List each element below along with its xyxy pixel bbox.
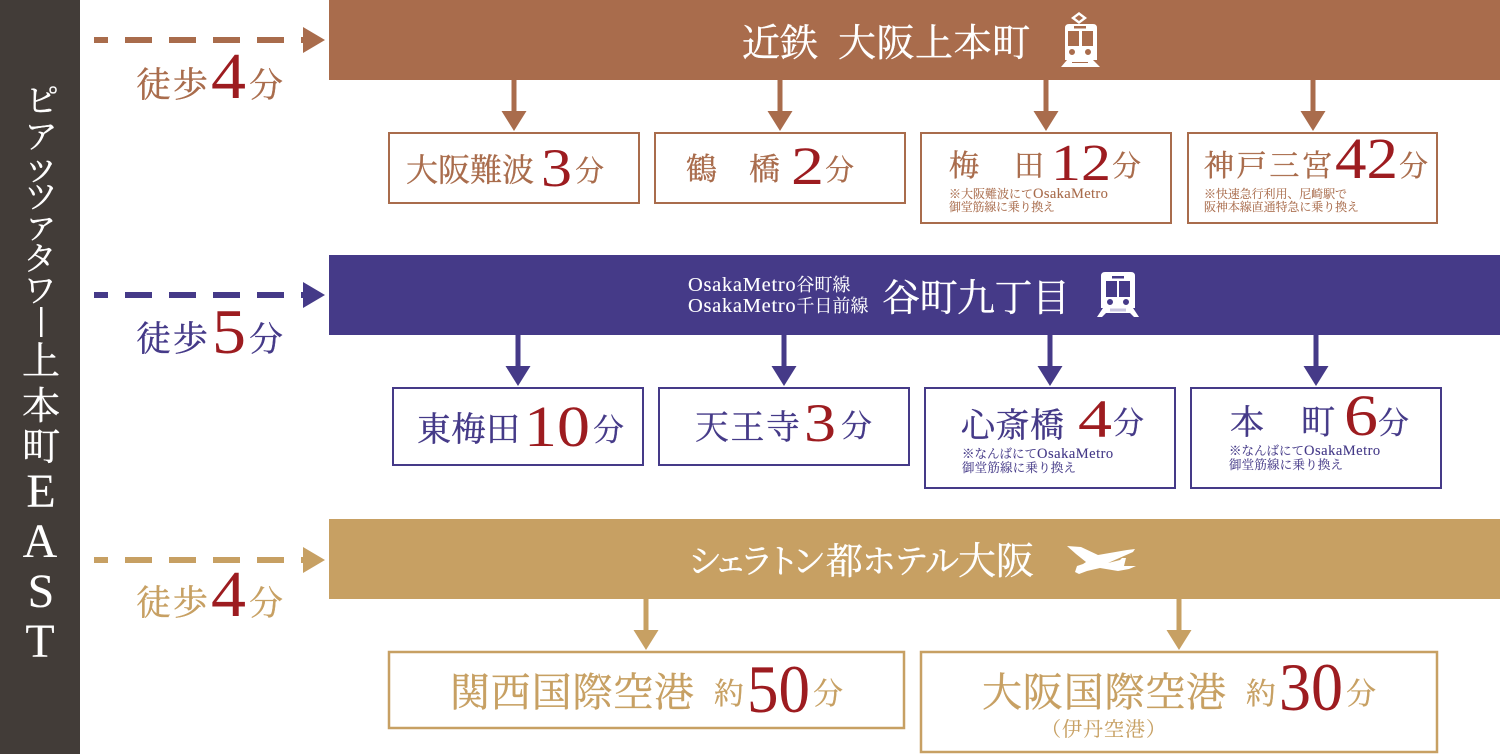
box: Osaka International Airport about 30 min: 大阪国際空港 <box>982 670 1226 715</box>
walking time: 4 minutes: 分 <box>249 67 283 105</box>
sidebar: building name: ッ <box>22 147 60 189</box>
walking time: 4 minutes: 徒歩 <box>136 66 208 105</box>
box: Umeda 12 min: 梅 <box>949 150 979 183</box>
box: Hommachi 6 min: 御堂筋線に乗り換え <box>1229 457 1343 472</box>
box: Umeda 12 min: 田 <box>1014 150 1044 183</box>
sidebar: building name: 町 <box>22 427 60 469</box>
walking arrow: Kintetsu <box>94 27 325 53</box>
walking time: 4 minutes: 4 <box>211 558 246 631</box>
sidebar: building name: ワ <box>24 274 56 310</box>
sidebar: building name <box>0 0 80 754</box>
box: Shinsaibashi 4 min: 分 <box>1113 406 1144 441</box>
walking time: 5 minutes: 徒歩 <box>136 320 208 359</box>
box: Tsuruhashi 2 min: 鶴 <box>686 152 717 187</box>
header bar: Sheraton Miyako Hotel Osaka: ホテル <box>862 544 959 581</box>
header bar: Tanimachi 9-chome: 谷町九丁目 <box>882 278 1070 320</box>
sidebar: building name: ツ <box>24 180 58 216</box>
box: Umeda 12 min: ※大阪難波にてOsakaMetro <box>949 186 1108 202</box>
box: Kobe Sannomiya 42 min: ※快速急行利用、尼崎駅で <box>1204 186 1347 201</box>
box: Higashi-Umeda 10 min: 10 <box>524 394 590 459</box>
box: Tennoji 3 min <box>659 388 909 465</box>
header bar: Kintetsu Osaka Uehommachi: 近鉄 <box>742 23 818 65</box>
box: Tsuruhashi 2 min: 分 <box>825 154 854 187</box>
box: Kobe Sannomiya 42 min: 神戸三宮 <box>1204 150 1332 183</box>
box: Hommachi 6 min: 町 <box>1301 405 1335 442</box>
header bar: Kintetsu Osaka Uehommachi <box>329 0 1500 80</box>
box: Osaka Namba 3 min <box>389 133 639 203</box>
box: Shinsaibashi 4 min: 4 <box>1078 389 1112 449</box>
connector arrows: Kintetsu <box>502 80 1326 131</box>
box: Osaka International Airport about 30 min: 30 <box>1279 649 1343 725</box>
box: Osaka Namba 3 min: 分 <box>575 155 604 188</box>
box: Shinsaibashi 4 min <box>925 388 1175 488</box>
box: Kobe Sannomiya 42 min <box>1188 126 1437 223</box>
box: Umeda 12 min <box>921 133 1171 223</box>
box: Tsuruhashi 2 min: 2 <box>791 136 824 196</box>
box: Tsuruhashi 2 min: 橋 <box>749 152 780 187</box>
sidebar: building name: T <box>25 615 55 668</box>
box: Hommachi 6 min <box>1191 383 1441 488</box>
box: Higashi-Umeda 10 min: 東梅田 <box>417 411 520 449</box>
box: Osaka Namba 3 min: 大阪難波 <box>406 152 534 188</box>
sidebar: building name: 本 <box>22 386 60 428</box>
box: Kobe Sannomiya 42 min: 42 <box>1335 126 1398 191</box>
box: Tennoji 3 min: 天王寺 <box>695 409 800 447</box>
header bar: Sheraton Miyako Hotel Osaka: 都 <box>826 542 863 583</box>
walking time: 4 minutes: 徒歩 <box>136 584 208 623</box>
box: Hommachi 6 min: 分 <box>1378 406 1409 441</box>
box: Tennoji 3 min: 3 <box>804 393 836 453</box>
walking time: 5 minutes <box>136 296 283 367</box>
walking arrow: Metro <box>94 282 325 308</box>
walking arrow: hotel <box>94 547 325 573</box>
box: Kobe Sannomiya 42 min: 分 <box>1399 150 1428 183</box>
walking time: 4 minutes: 4 <box>211 40 246 113</box>
box: Umeda 12 min: 分 <box>1112 150 1141 183</box>
header bar: Tanimachi 9-chome <box>329 255 1500 335</box>
box: Higashi-Umeda 10 min: 分 <box>593 413 624 448</box>
box: Shinsaibashi 4 min: 心斎橋 <box>961 407 1064 445</box>
walking time: 5 minutes: 分 <box>249 321 283 359</box>
sidebar: building name: E <box>26 465 56 518</box>
box: Umeda 12 min: 12 <box>1051 135 1111 192</box>
header bar: Kintetsu Osaka Uehommachi: 大阪上本町 <box>838 23 1030 65</box>
icon: metro train <box>1097 272 1139 317</box>
sidebar: building name: ピ <box>26 84 58 120</box>
box: Shinsaibashi 4 min: ※なんばにてOsakaMetro <box>962 446 1114 462</box>
header bar: Sheraton Miyako Hotel Osaka: 大阪 <box>958 541 1034 583</box>
sidebar: building name: タ <box>24 242 56 278</box>
walking time: 4 minutes: 分 <box>249 585 283 623</box>
header bar: Tanimachi 9-chome: OsakaMetro千日前線 <box>688 295 868 317</box>
header bar: Tanimachi 9-chome: OsakaMetro谷町線 <box>688 274 850 296</box>
box: Hommachi 6 min: 6 <box>1344 383 1378 448</box>
walking time: 4 minutes <box>136 558 283 631</box>
sidebar: building name: 上 <box>22 341 60 383</box>
icon: airplane <box>1067 546 1136 574</box>
connector arrows: Metro <box>506 335 1328 386</box>
box: Osaka International Airport about 30 min: 約 <box>1246 678 1276 711</box>
icon: tram <box>1061 12 1100 67</box>
box: Kansai International Airport about 50 min: 分 <box>813 678 843 711</box>
connector arrows: hotel <box>634 599 1192 650</box>
box: Hommachi 6 min: ※なんばにてOsakaMetro <box>1229 443 1381 459</box>
box: Hommachi 6 min: 本 <box>1230 404 1264 442</box>
header bar: Sheraton Miyako Hotel Osaka: シェラトン <box>688 544 826 581</box>
box: Tsuruhashi 2 min <box>655 133 905 203</box>
walking time: 4 minutes <box>136 40 283 113</box>
box: Shinsaibashi 4 min: 御堂筋線に乗り換え <box>962 460 1076 475</box>
box: Osaka International Airport about 30 min: 分 <box>1346 678 1376 711</box>
box: Osaka International Airport about 30 min: （伊丹空港） <box>1041 718 1166 741</box>
box: Osaka Namba 3 min: 3 <box>541 138 572 198</box>
box: Kobe Sannomiya 42 min: 阪神本線直通特急に乗り換え <box>1204 199 1359 214</box>
header bar: Sheraton Miyako Hotel Osaka <box>329 519 1500 599</box>
walking time: 5 minutes: 5 <box>212 296 246 367</box>
sidebar: building name: S <box>28 565 54 618</box>
box: Kansai International Airport about 50 min <box>389 651 904 728</box>
box: Higashi-Umeda 10 min <box>393 388 643 465</box>
sidebar: building name: A <box>23 515 58 568</box>
box: Umeda 12 min: 御堂筋線に乗り換え <box>949 199 1055 214</box>
sidebar: building name: ア <box>24 120 58 156</box>
sidebar: building name: ァ <box>22 205 60 247</box>
box: Kansai International Airport about 50 min: 約 <box>714 678 744 711</box>
box: Kansai International Airport about 50 min: 関西国際空港 <box>450 670 694 715</box>
box: Kansai International Airport about 50 min: 50 <box>747 651 810 727</box>
box: Tennoji 3 min: 分 <box>841 409 872 444</box>
box: Osaka International Airport about 30 min <box>921 649 1437 752</box>
